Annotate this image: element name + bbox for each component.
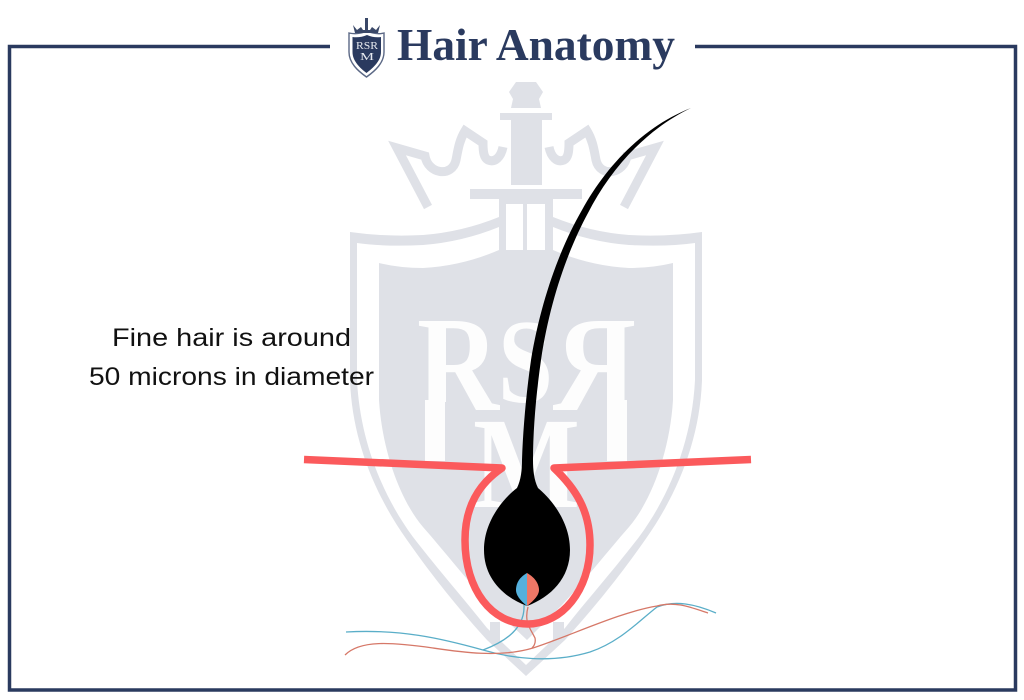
watermark: shield crest: M — [473, 392, 580, 536]
annotation text: 50 microns in diameter — [89, 363, 374, 391]
watermark: shield crest: S — [498, 295, 553, 428]
watermark: shield crest: R — [553, 290, 636, 440]
blood vessels — [345, 603, 716, 659]
watermark: shield crest — [350, 82, 702, 676]
hair shaft and bulb — [484, 108, 691, 606]
hair papilla — [516, 573, 539, 606]
logo: small shield: M — [360, 51, 374, 63]
annotation text: Fine hair is around — [112, 324, 351, 352]
annotation text — [89, 324, 374, 391]
skin and follicle outline — [304, 460, 751, 624]
title: Hair Anatomy — [397, 19, 675, 70]
logo: small shield — [349, 18, 384, 77]
logo: small shield: RSR — [356, 40, 379, 52]
watermark: shield crest: R — [417, 290, 500, 440]
